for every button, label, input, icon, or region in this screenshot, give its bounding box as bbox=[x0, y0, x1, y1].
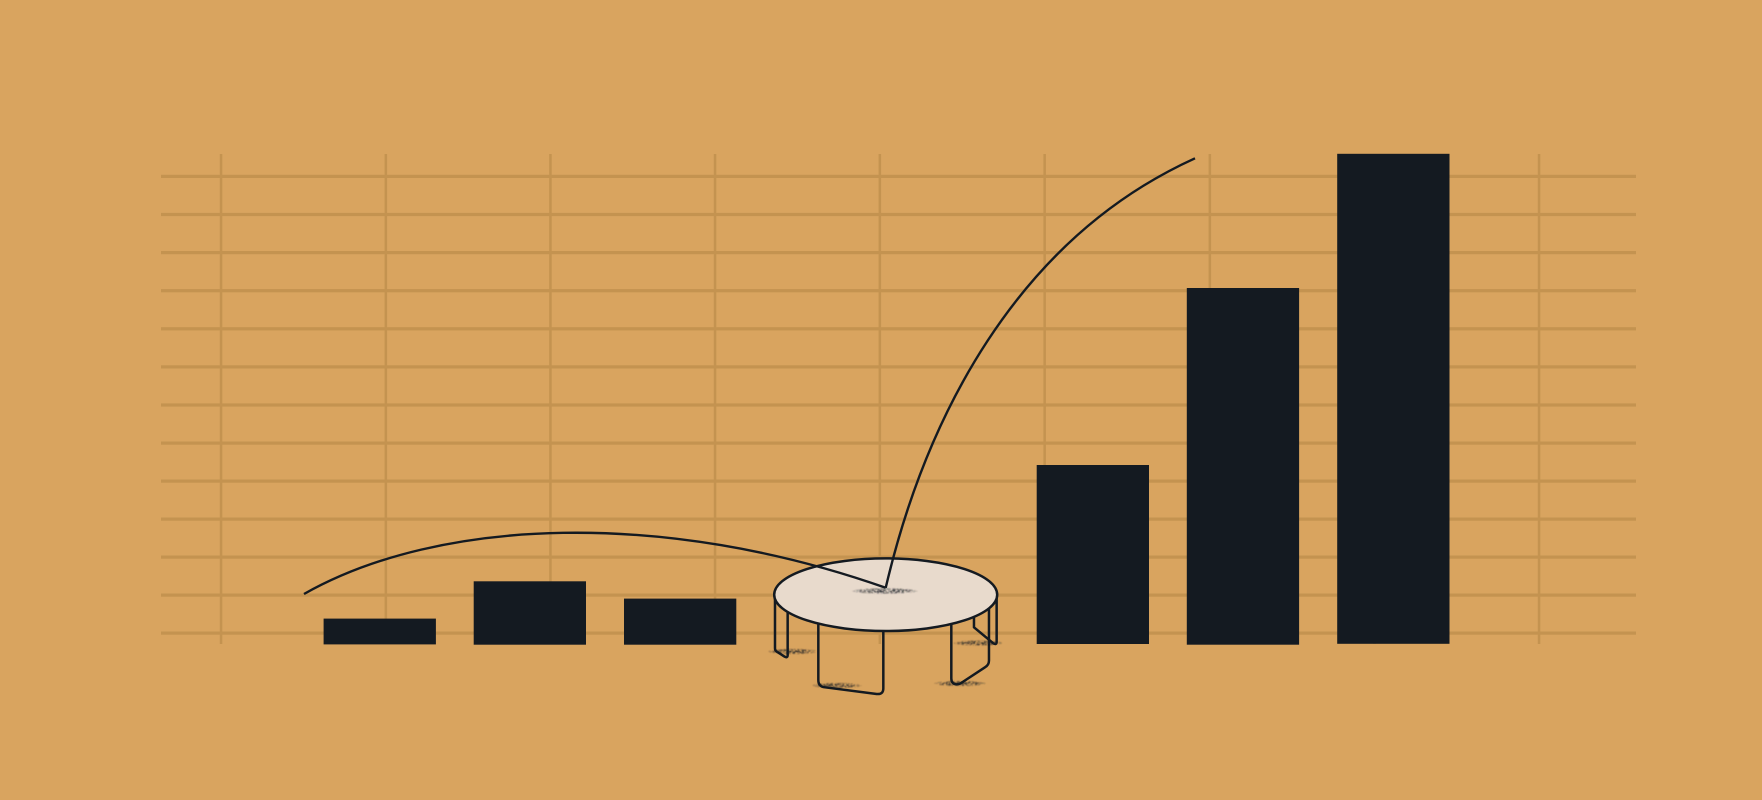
table legs bbox=[775, 597, 997, 694]
table centre shadow bbox=[852, 588, 918, 594]
leg shadows bbox=[768, 640, 1003, 688]
chart grid bbox=[161, 154, 1636, 644]
bar 5 bbox=[1187, 288, 1299, 645]
bar 1 bbox=[324, 619, 436, 644]
bar 6 bbox=[1337, 154, 1450, 644]
round table bbox=[768, 558, 1003, 694]
curve: right rising arc bbox=[886, 158, 1195, 588]
bar 2 bbox=[474, 581, 586, 645]
bars bbox=[324, 154, 1450, 645]
curve: left arc bbox=[304, 533, 886, 594]
table top bbox=[774, 558, 997, 631]
bar 3 bbox=[624, 599, 736, 645]
bar 4 bbox=[1037, 465, 1149, 644]
